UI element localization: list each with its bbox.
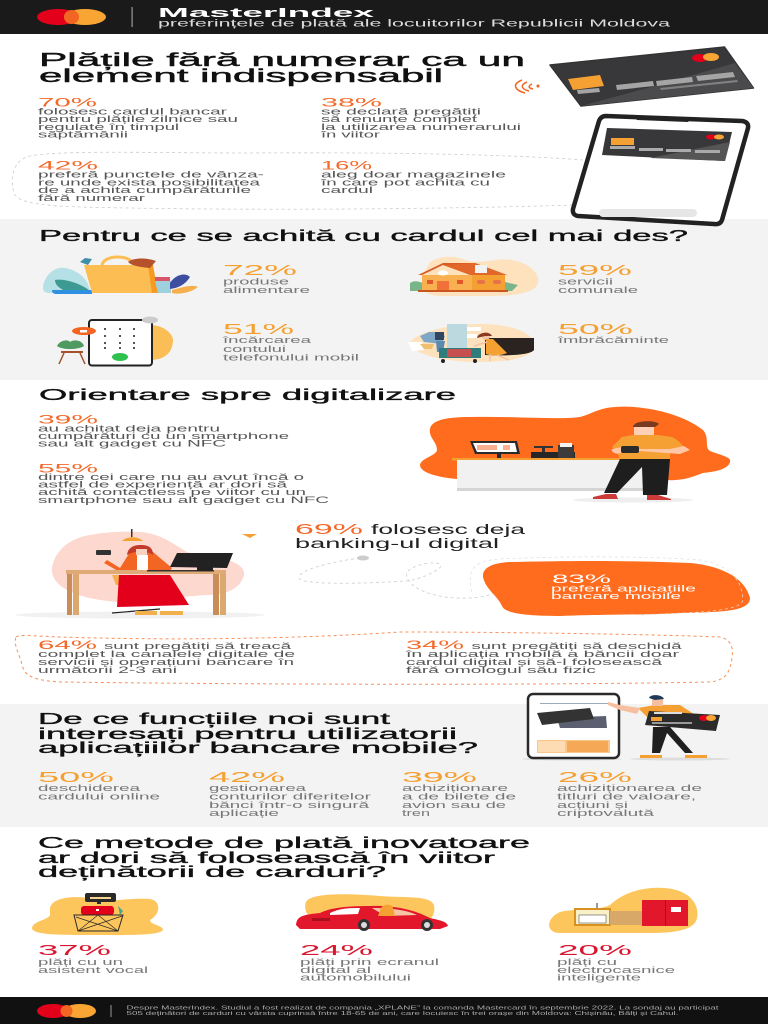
stat: 39%: 39%: [402, 769, 477, 786]
stat: 42%: [38, 158, 264, 204]
stat: 26%: 26%: [558, 769, 632, 786]
stat: 24%: [300, 942, 439, 984]
stat: 55%: astfel de experiență ar dori să: [38, 480, 288, 490]
panel: innovative payment methods: [32, 835, 698, 984]
heading: Ce metode de plată inovatoare: [38, 835, 530, 852]
icon: clothes shopping: [408, 324, 534, 363]
icon: mobile phone: [57, 316, 173, 366]
stat: 20%: plăți cu: [557, 957, 617, 968]
stat: 42%: re unde exista posibilitatea: [38, 178, 261, 188]
stat: 59%: servicii: [558, 276, 613, 288]
stat: 55%: 55%: [38, 462, 99, 476]
heading: Orientare spre digitalizare: [39, 387, 456, 404]
stat: 38%: la utilizarea numerarului: [321, 122, 521, 133]
illustration: woman at desk: [15, 529, 265, 618]
stat: 34%: [404, 638, 683, 676]
illustration: bank card: [550, 47, 754, 106]
stat: 59%: comunale: [558, 285, 638, 296]
stat: 38%: 38%: [321, 96, 383, 110]
stat: 39%: [402, 769, 516, 819]
icon: Mastercard logo: [37, 1004, 96, 1018]
stat: 42%: fără numerar: [38, 193, 145, 204]
stat: 70%: regulate în timpul: [38, 122, 179, 133]
stat: 20%: electrocasnice: [557, 965, 675, 976]
stat: 39%: [38, 412, 289, 450]
callout: 83%: bancare mobile: [551, 591, 681, 602]
stat: 24%: digital al: [300, 965, 371, 976]
stat: 16%: [319, 158, 506, 196]
stat: 26%: criptovalută: [557, 808, 655, 819]
footer note: 505 deținători de carduri cu vârsta cuprinsă între 18-65 de ani, care locuiesc în trei orașe din Moldova: Chișinău, Bălți și Cahul.: [126, 1011, 679, 1017]
stat: 24%: 24%: [300, 942, 373, 959]
stat: 34%: cardul digital și să-l folosească: [406, 657, 663, 668]
stat: 50%: [38, 769, 160, 802]
stat: 51%: telefonului mobil: [223, 352, 359, 364]
stat: 16%: cardul: [321, 185, 373, 196]
illustration: phone with card: [573, 116, 748, 224]
icon: car: [296, 894, 448, 931]
illustration: phone and man with card: [522, 694, 730, 760]
icon: smart appliances: [549, 888, 698, 933]
stat: 20%: inteligente: [557, 972, 641, 984]
heading: ar dori să folosească în viitor: [38, 850, 496, 867]
stat: 55%: smartphone sau alt gadget cu NFC: [38, 495, 329, 506]
dashed outline: [12, 152, 583, 209]
stat: 50%: deschiderea: [38, 783, 141, 794]
heading: De ce funcțiile noi sunt: [38, 711, 391, 728]
text: 69% digital banking: 69%: [295, 521, 363, 538]
stat: 42%: bănci într-o singură: [209, 800, 370, 811]
footer note: [126, 1006, 719, 1017]
stat: 38%: să renunțe complet: [321, 114, 478, 125]
header bar: [0, 0, 768, 34]
stat: 64%: următorii 2-3 ani: [38, 665, 177, 676]
stat: 55%: [38, 462, 329, 506]
stat: 51%: 51%: [223, 321, 294, 338]
stat: 37%: plăți cu un: [38, 957, 123, 968]
icon: contactless waves: [516, 80, 539, 93]
header subtitle: preferințele de plată ale locuitorilor Republicii Moldova: [158, 18, 670, 30]
stat: 20%: 20%: [558, 942, 632, 959]
panel: digitalization: [15, 387, 750, 684]
stat: 50%: [556, 321, 669, 346]
stat: 16%: aleg doar magazinele: [321, 170, 506, 180]
stat: 70%: [38, 96, 238, 140]
stat: 55%: dintre cei care nu au avut încă o: [38, 472, 304, 483]
stat: 59%: 59%: [558, 262, 632, 279]
panel: most frequent card purchases: [0, 219, 768, 380]
heading: interesați pentru utilizatorii: [38, 726, 457, 743]
stat: 51%: contului: [223, 344, 286, 355]
dashed connector: [299, 558, 497, 598]
icon: Mastercard logo: [37, 9, 106, 25]
stat: 59%: [558, 262, 638, 296]
heading: Pentru ce se achită cu cardul cel mai des?: [39, 228, 688, 245]
stat: 42%: aplicație: [209, 808, 279, 819]
stat: 26%: [557, 769, 702, 819]
heading: Plățile fără numerar ca un: [39, 50, 525, 70]
stat: 64%: servicii și operațiuni bancare în: [38, 657, 294, 668]
stat: 50%: 50%: [38, 769, 114, 786]
stat: 24%: automobilului: [300, 972, 411, 984]
stat: 72%: produse: [223, 276, 289, 288]
stat: 39%: sau alt gadget cu NFC: [38, 438, 226, 450]
stat: 64%: sunt pregătiți să treacă: [104, 641, 292, 652]
stat: 42%: 42%: [209, 769, 285, 786]
stat: 72%: 72%: [223, 262, 297, 279]
stat: 70%: săptămânii: [38, 130, 128, 140]
panel: cashless payments: [12, 47, 754, 224]
stat: 42%: preferă punctele de vânza-: [38, 170, 264, 180]
text: 69% digital banking: folosesc deja: [371, 521, 525, 537]
stat: 37%: asistent vocal: [38, 965, 148, 976]
callout: 83%: 83%: [552, 572, 612, 586]
heading: deținătorii de carduri?: [38, 864, 386, 881]
stat: 50%: 50%: [558, 321, 633, 338]
heading: [38, 835, 530, 881]
stat: 26%: acțiuni și: [557, 800, 628, 811]
stat: 26%: titluri de valoare,: [557, 792, 696, 802]
stat: 70%: pentru plățile zilnice sau: [38, 114, 238, 125]
stat: 72%: alimentare: [223, 285, 310, 296]
stat: 38%: în viitor: [319, 130, 380, 140]
stat: 64%: [38, 638, 295, 676]
callout: 83%: preferă aplicațiile: [551, 584, 696, 594]
stat: 50%: cardului online: [38, 792, 160, 802]
icon: grocery bag: [43, 257, 198, 294]
callout: 83%: [470, 557, 750, 616]
stat: 64%: complet la canalele digitale de: [38, 649, 295, 660]
text: 69% digital banking: banking-ul digital: [295, 535, 499, 551]
dot: [357, 556, 369, 560]
stat: 55%: achită contactless pe viitor cu un: [38, 487, 306, 498]
stat: 64%: 64%: [38, 638, 98, 652]
stat: 42%: de a achita cumpărăturile: [38, 185, 251, 196]
stat: 39%: avion sau de: [402, 800, 506, 811]
stat: 42%: conturilor diferitelor: [209, 792, 371, 802]
panel: new app features: [0, 694, 768, 827]
stat: 34%: sunt pregătiți să deschidă: [472, 641, 683, 652]
stat: 42%: gestionarea: [209, 783, 307, 794]
stat: 72%: [223, 262, 310, 296]
stat: 20%: [557, 942, 675, 984]
stat: 70%: folosesc cardul bancar: [38, 106, 227, 118]
stat: 39%: 39%: [38, 412, 99, 426]
icon: voice assistant: [32, 893, 163, 935]
stat: 39%: au achitat deja pentru: [38, 424, 220, 434]
stat: 38%: [319, 96, 521, 140]
stat: 51%: încărcarea: [221, 335, 312, 346]
stat: 34%: fără omologul său fizic: [406, 665, 596, 676]
stat: 51%: [221, 321, 359, 364]
icon: house: [410, 257, 538, 296]
footer: [0, 997, 768, 1024]
stat: 39%: achiziționare: [402, 783, 508, 794]
stat: 50%: îmbrăcăminte: [556, 335, 669, 346]
stat: 39%: a de bilete de: [402, 792, 516, 802]
stat: 16%: 16%: [321, 158, 373, 172]
stat: 70%: 70%: [38, 96, 98, 110]
stat: 37%: 37%: [38, 942, 111, 959]
stat: 16%: în care pot achita cu: [319, 178, 490, 188]
dashed callout: readiness: [15, 632, 732, 684]
stat: 37%: [38, 942, 148, 976]
footer note: Despre MasterIndex. Studiul a fost realizat de compania „XPLANE” la comanda Mastercard în septembrie 2022. La sondaj au participat: [126, 1006, 719, 1012]
header title: MasterIndex: [158, 6, 374, 20]
stat: 39%: tren: [402, 808, 430, 819]
stat: 42%: 42%: [38, 158, 99, 172]
heading: aplicațiilor bancare mobile?: [38, 740, 478, 757]
stat: 34%: 34%: [406, 638, 465, 652]
stat: 24%: plăți prin ecranul: [300, 957, 439, 968]
stat: 42%: [209, 769, 371, 819]
heading: [39, 50, 525, 86]
heading: element indispensabil: [39, 66, 443, 86]
stat: 39%: cumpărături cu un smartphone: [38, 431, 289, 442]
stat: 34%: în aplicația mobilă a băncii doar: [404, 649, 679, 660]
stat: 26%: achiziționarea de: [557, 783, 702, 794]
stat: 38%: se declară pregătiți: [321, 106, 481, 118]
text: 69% digital banking: [295, 521, 525, 551]
illustration: checkout scene: [420, 407, 730, 502]
heading: [38, 711, 478, 757]
